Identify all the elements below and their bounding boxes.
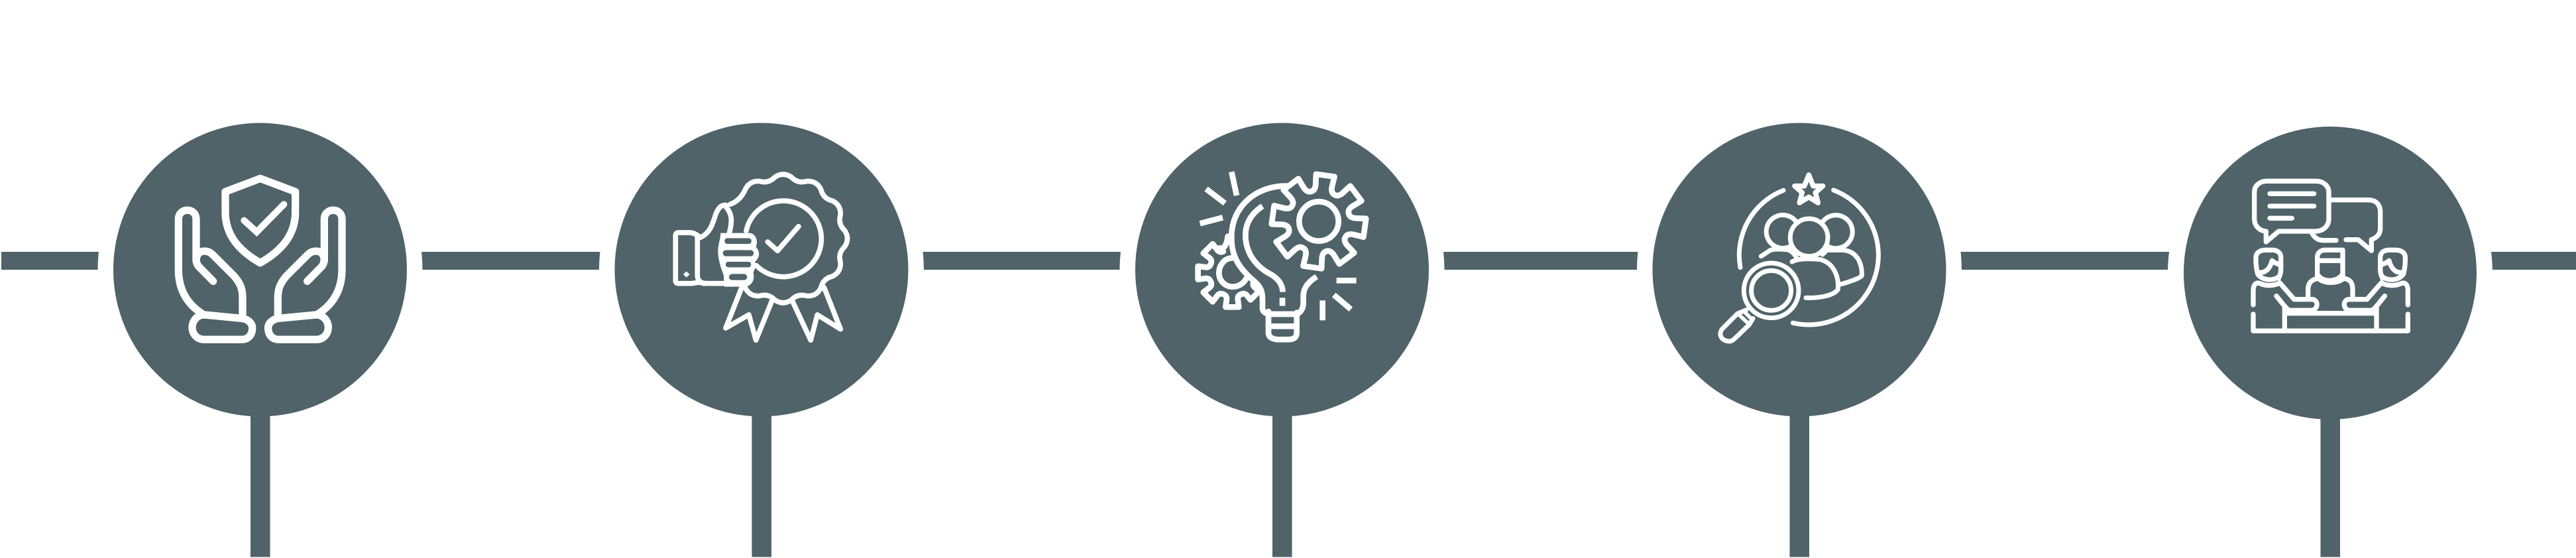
node 2: quality approval bbox=[599, 107, 924, 557]
node 1: protection bbox=[98, 107, 423, 557]
icon: three people in conversation bbox=[2253, 181, 2408, 331]
icon: thumbs up with rosette bbox=[675, 174, 848, 340]
horizontal connector bars bbox=[1, 252, 2576, 270]
icon: hands holding shield bbox=[178, 178, 342, 339]
node 3: innovation bbox=[1120, 107, 1445, 557]
icon: magnifier over people and star bbox=[1720, 175, 1878, 341]
node 4: talent search bbox=[1637, 107, 1962, 557]
icon: light bulb with gears bbox=[1198, 169, 1371, 339]
node 5: team discussion bbox=[2168, 111, 2492, 557]
